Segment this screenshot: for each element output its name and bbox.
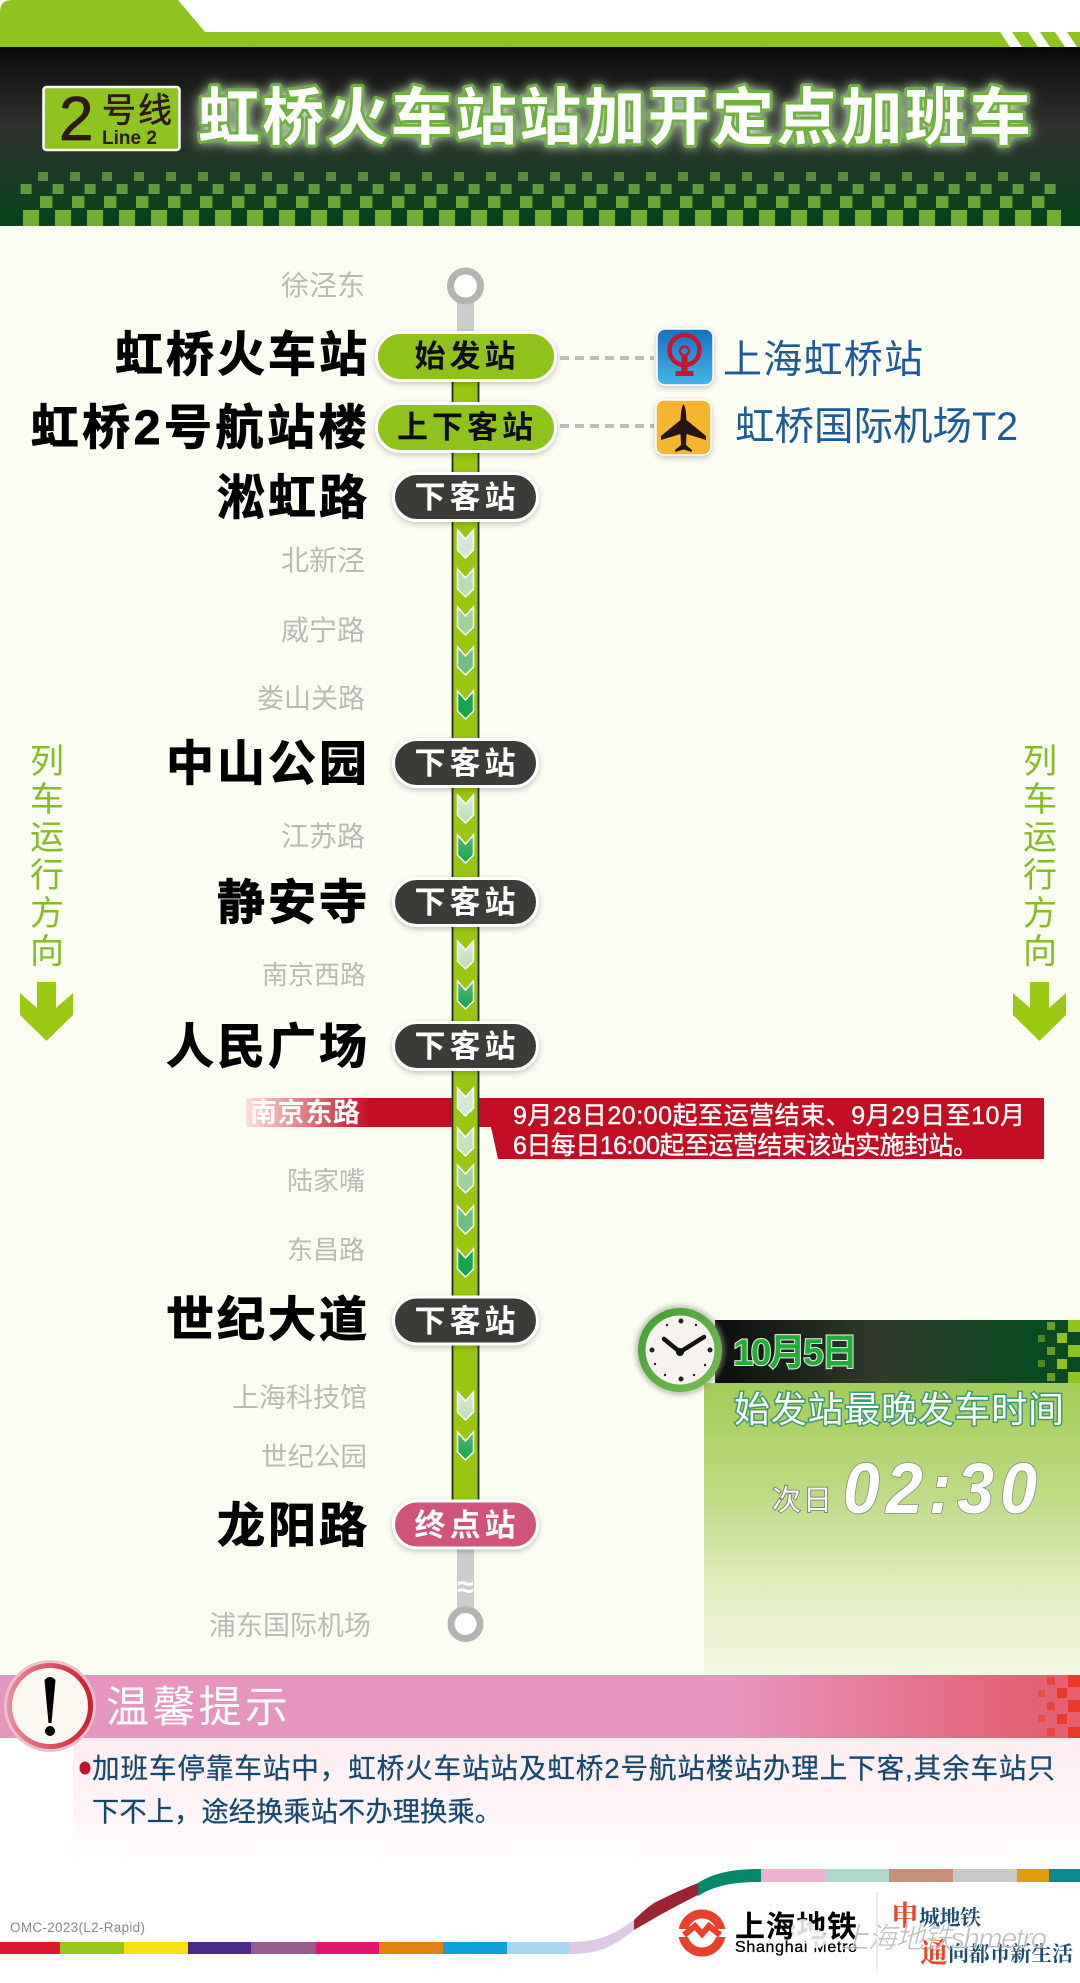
- slogan: 申: [891, 1900, 919, 1932]
- direction label left: 方: [30, 895, 64, 933]
- line rail: [450, 271, 480, 1638]
- map background: [0, 226, 1080, 1675]
- icon: plane: [656, 400, 711, 455]
- note text: 加班车停靠车站中，虹桥火车站站及虹桥2号航站楼站办理上下客,其余车站只: [92, 1753, 1055, 1784]
- station pill: 上下客站: [376, 404, 556, 452]
- station pill: 龙阳路 终点站: [394, 1501, 538, 1548]
- minor station names: 上海科技馆: [232, 1383, 367, 1413]
- break mark: ≈: [457, 1571, 474, 1604]
- transfer: airport: 虹桥国际机场T2: [735, 405, 1018, 449]
- closure notice: 南京东路: [246, 1098, 1044, 1160]
- direction label right: 向: [1023, 933, 1057, 971]
- date bar: [715, 1320, 1080, 1383]
- direction label right: 运: [1023, 819, 1057, 857]
- pink heading band: [0, 1675, 1080, 1738]
- minor station names: 世纪公园: [261, 1442, 367, 1472]
- station pill: 静安寺 下客站: [394, 878, 538, 926]
- bullet: [80, 1762, 90, 1774]
- minor station names: 北新泾: [281, 545, 365, 576]
- arrow: [1013, 982, 1066, 1041]
- station pill: 中山公园 下客站: [394, 740, 538, 786]
- panel: reminder: 下不上，途经换乘站不办理换乘。: [92, 1796, 502, 1827]
- line 2 badge: Line 2: [102, 128, 157, 149]
- closure notice: 南京东路: 6日每日16:00起至运营结束该站实施封站。: [513, 1132, 978, 1160]
- logo: Shanghai Metro: Shanghai Metro: [735, 1939, 857, 1956]
- direction label left: 向: [30, 933, 64, 971]
- time: 02:30: [843, 1449, 1037, 1529]
- panel: last departure time: [635, 1305, 1080, 1675]
- panel: reminder: [0, 1660, 1080, 1865]
- direction chevrons: [458, 530, 474, 1460]
- minor station names: 徐泾东: [281, 270, 365, 301]
- slogan: 通: [920, 1937, 948, 1969]
- station pill: 人民广场 下客站: [394, 1022, 538, 1070]
- divider: [876, 1892, 878, 1970]
- minor station names: 浦东国际机场: [209, 1611, 371, 1641]
- slogan: 城地铁: [919, 1906, 981, 1930]
- end terminus: [451, 1610, 480, 1638]
- start terminus: [450, 271, 480, 301]
- station pill: 淞虹路 下客站: 下客站: [414, 480, 520, 515]
- direction label right: 列: [1023, 743, 1057, 781]
- station pill: 静安寺 下客站: 下客站: [414, 885, 520, 920]
- transfer: railway station: 上海虹桥站: [723, 339, 923, 382]
- major station names: 虹桥2号航站楼: [31, 402, 370, 455]
- closure notice: 南京东路: 南京东路: [250, 1098, 360, 1128]
- minor station names: 南京西路: [262, 960, 366, 990]
- icon: warning: [4, 1660, 96, 1752]
- arrow: [20, 982, 73, 1041]
- checker pattern: [20, 172, 1061, 226]
- direction label right: 方: [1023, 895, 1057, 933]
- minor station names: 江苏路: [281, 821, 365, 852]
- line 2 badge: 号线: [102, 92, 172, 130]
- closure notice: 南京东路: 9月28日20:00起至运营结束、9月29日至10月: [513, 1102, 1025, 1130]
- transfer: airport: [560, 400, 1018, 455]
- note background: [73, 1738, 1080, 1865]
- heading: 温馨提示: [106, 1684, 288, 1732]
- direction label right: 车: [1023, 781, 1057, 819]
- station pill: 人民广场 下客站: 下客站: [414, 1029, 520, 1064]
- footer: [0, 1869, 1080, 1970]
- station pill: 中山公园 下客站: 下客站: [414, 746, 520, 781]
- direction label right: [1013, 743, 1066, 1041]
- minor station names: 陆家嘴: [287, 1166, 365, 1196]
- station pill: 龙阳路 终点站: 终点站: [414, 1508, 520, 1543]
- next day label: 次日: [772, 1484, 832, 1517]
- direction label left: 运: [30, 819, 64, 857]
- checker corner: [1038, 1320, 1080, 1383]
- major station names: 中山公园: [166, 738, 370, 791]
- transfer: railway station: [560, 329, 923, 385]
- minor station names: 东昌路: [287, 1235, 365, 1265]
- minor station names: [209, 270, 371, 1641]
- station pill: 始发站: [376, 332, 556, 380]
- line 2 badge: [44, 85, 180, 154]
- major station names: 龙阳路: [217, 1500, 370, 1553]
- major station names: 世纪大道: [166, 1294, 370, 1347]
- colour strip: [0, 1869, 1080, 1954]
- major station names: 虹桥火车站: [115, 329, 370, 382]
- logo: Shanghai Metro: 上海地铁: [735, 1911, 857, 1944]
- direction label left: 车: [30, 781, 64, 819]
- station pill: 淞虹路 下客站: [394, 474, 538, 520]
- direction label left: 列: [30, 743, 64, 781]
- station pill: 世纪大道 下客站: [394, 1297, 538, 1344]
- watermark: 上海地铁shmetro: [840, 1923, 1047, 1955]
- station pill: 世纪大道 下客站: 下客站: [414, 1304, 520, 1339]
- slogan: 向都市新生活: [948, 1942, 1073, 1966]
- dark gradient header: [0, 47, 1080, 226]
- station pill: 始发站: 始发站: [414, 339, 520, 374]
- header banner: [0, 0, 1080, 226]
- logo: Shanghai Metro: [676, 1911, 857, 1956]
- slogan: [891, 1900, 1073, 1969]
- green top band: [0, 0, 1080, 48]
- major station names: [31, 329, 370, 1553]
- title: 虹桥火车站站加开定点加班车: [198, 84, 1031, 153]
- major station names: 淞虹路: [217, 472, 370, 525]
- direction label right: 行: [1023, 857, 1057, 895]
- major station names: 静安寺: [217, 877, 370, 930]
- minor station names: 威宁路: [281, 615, 365, 646]
- white stripes: [1000, 32, 1077, 47]
- icon: clock: [635, 1305, 725, 1395]
- direction label left: [20, 743, 73, 1041]
- minor station names: 娄山关路: [257, 684, 365, 714]
- icon: railway: [657, 329, 713, 385]
- panel heading: 始发站最晚发车时间: [734, 1389, 1064, 1430]
- checker corner: [1038, 1675, 1080, 1738]
- major station names: 人民广场: [166, 1021, 370, 1074]
- direction label left: 行: [30, 857, 64, 895]
- date: 10月5日: [733, 1332, 858, 1373]
- station pill: 上下客站: 上下客站: [397, 410, 537, 445]
- line 2 badge: 2: [59, 85, 93, 154]
- document code: OMC-2023(L2-Rapid): [10, 1920, 145, 1935]
